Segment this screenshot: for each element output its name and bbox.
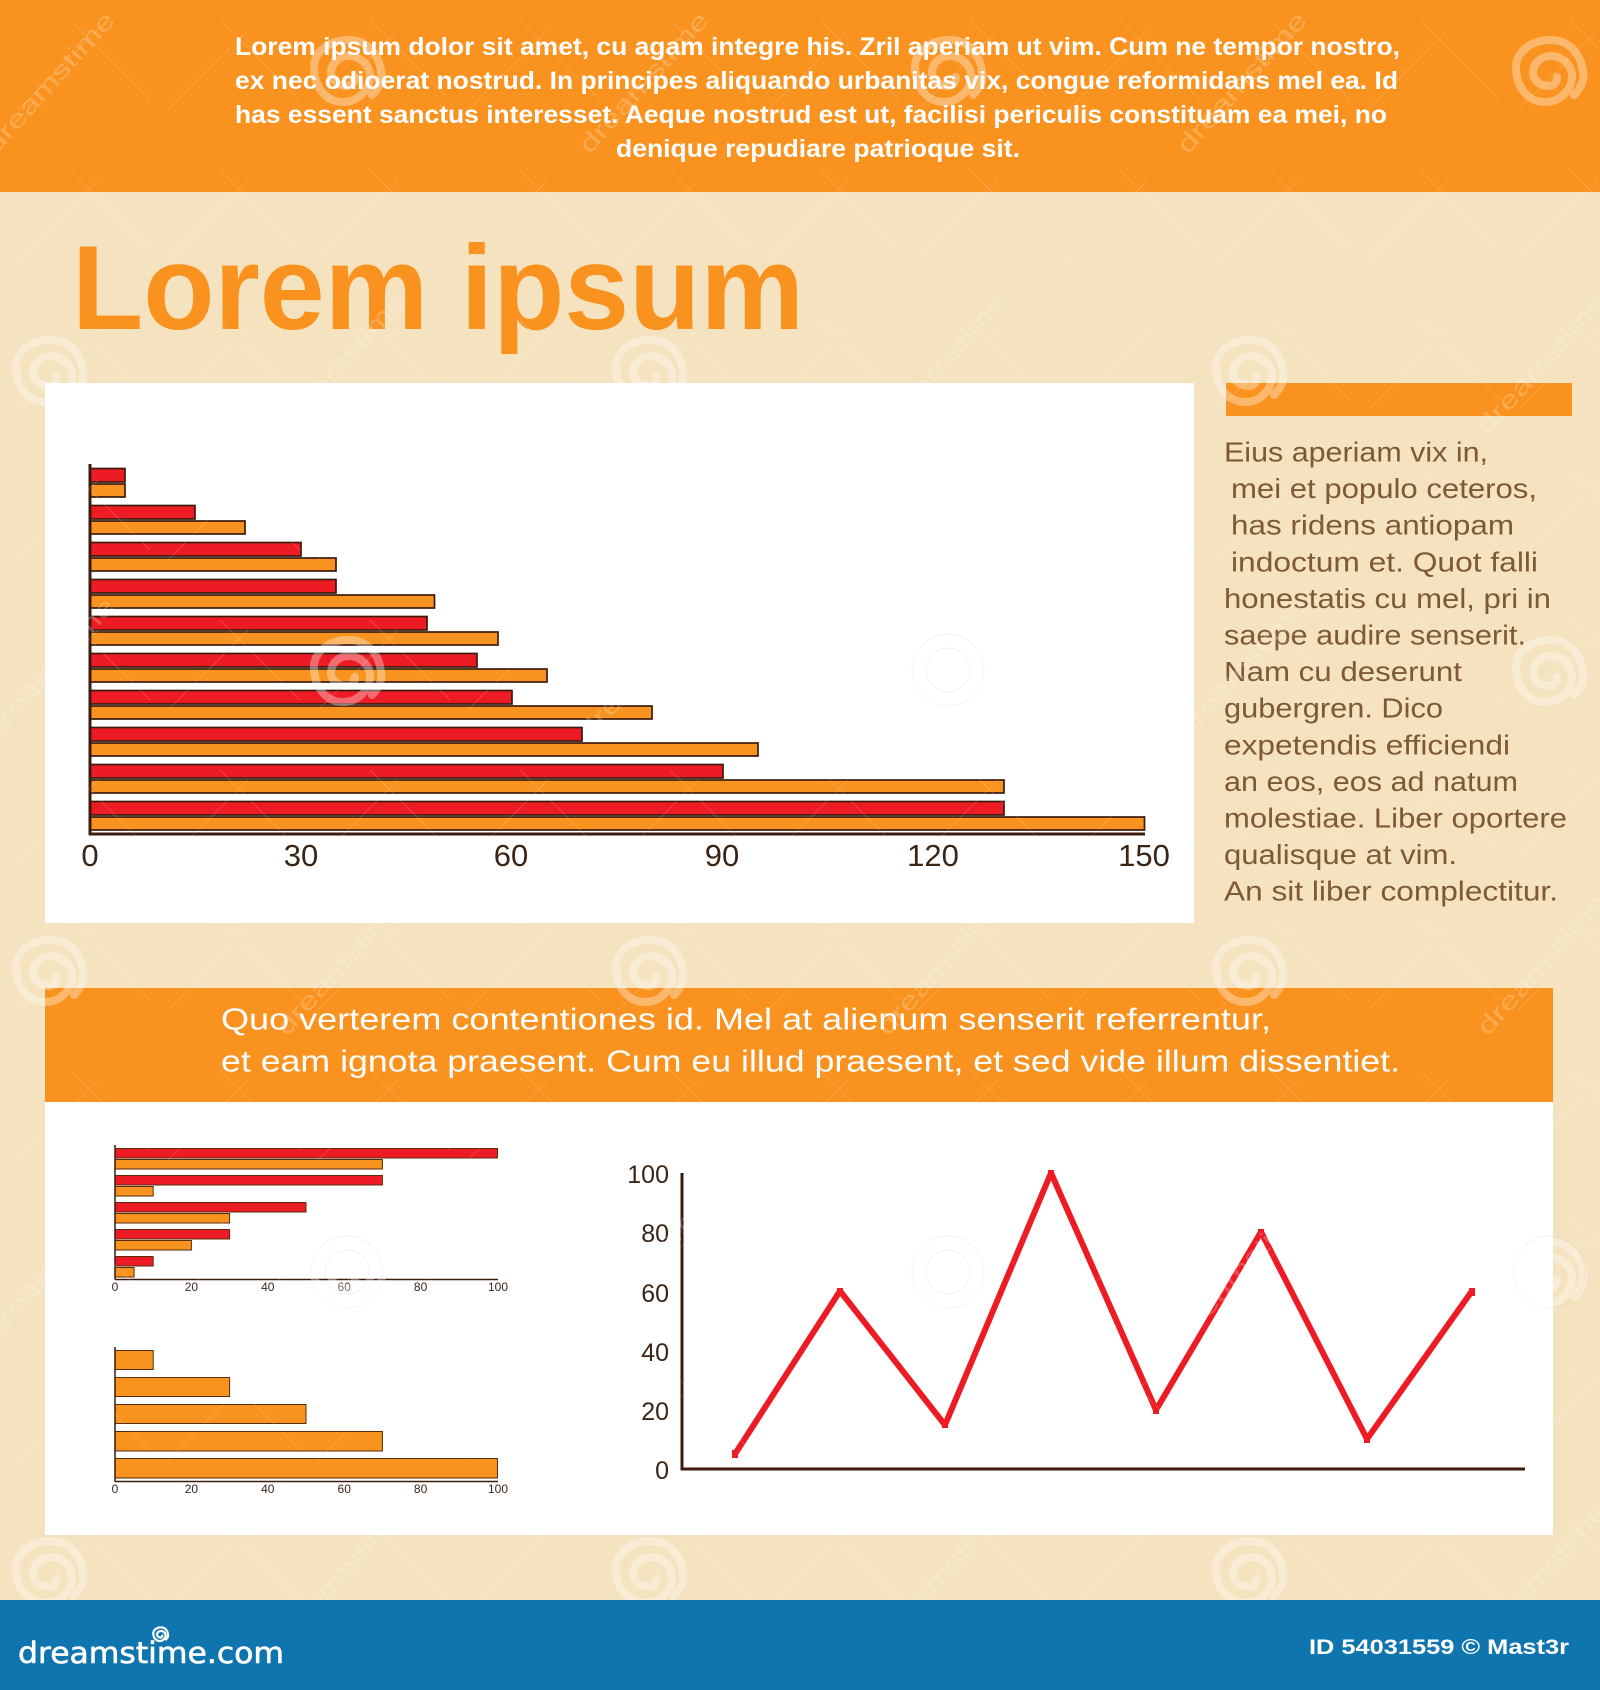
- watermark overlay: dreamstime: [573, 1192, 715, 1345]
- sidebar text: Nam cu deserunt: [1224, 656, 1462, 687]
- watermark overlay: dreamstime: [573, 592, 715, 745]
- axis labels: main bar chart: 150: [1118, 838, 1170, 873]
- sidebar text: saepe audire senserit.: [1224, 620, 1526, 650]
- sidebar text: qualisque at vim.: [1224, 839, 1457, 870]
- header paragraph: has essent sanctus interesset. Aeque nostrud est ut, facilisi periculis constituam ea mei, no: [235, 101, 1387, 129]
- watermark overlay: dreamstime: [871, 888, 1013, 1041]
- sidebar text: has ridens antiopam: [1231, 510, 1514, 541]
- sidebar text: indoctum et. Quot falli: [1231, 546, 1538, 577]
- header paragraph: denique repudiare patrioque sit.: [616, 135, 1020, 163]
- chart: small paired bars: 0: [112, 1280, 119, 1294]
- section band: [45, 988, 1553, 1102]
- watermark overlay: dreamstime: [1471, 1497, 1600, 1650]
- chart: small paired bars: 20: [185, 1280, 198, 1294]
- chart: paired horizontal bars: [89, 464, 1145, 835]
- sidebar text: gubergren. Dico: [1224, 693, 1443, 724]
- chart: small single bars: 80: [414, 1482, 428, 1496]
- chart: small paired bars: 80: [414, 1280, 428, 1294]
- watermark overlay: dreamstime: [1171, 6, 1313, 159]
- axis labels: main bar chart: 60: [494, 838, 528, 873]
- watermark overlay: dreamstime: [1471, 287, 1600, 440]
- chart: line chart: 20: [641, 1398, 669, 1426]
- chart: small single bars: 100: [488, 1482, 508, 1496]
- chart: small paired bars: 60: [338, 1280, 351, 1294]
- watermark overlay: dreamstime: [573, 6, 715, 159]
- chart: small single bars: 40: [261, 1482, 275, 1496]
- watermark overlay: dreamstime: [1171, 1192, 1313, 1345]
- sidebar text: Eius aperiam vix in,: [1224, 436, 1488, 468]
- header paragraph: ex nec odioerat nostrud. In principes aliquando urbanitas vix, congue reformidans mel ea. Id: [235, 67, 1398, 95]
- sidebar text: expetendis efficiendi: [1224, 729, 1510, 760]
- chart: line chart: 40: [641, 1339, 669, 1367]
- watermark overlay: dreamstime: [871, 287, 1013, 440]
- sidebar text: an eos, eos ad natum: [1224, 766, 1518, 797]
- chart: small single bars: 20: [185, 1482, 198, 1496]
- axis labels: main bar chart: 120: [907, 838, 959, 873]
- watermark overlay: dreamstime: [270, 287, 412, 440]
- section band text: [221, 1002, 1400, 1078]
- chart: small paired bars: [112, 1145, 508, 1294]
- chart: small paired bars: 100: [488, 1280, 508, 1294]
- header band: [0, 0, 1600, 192]
- footer: [0, 1600, 1600, 1690]
- section band text: Quo verterem contentiones id. Mel at alienum senserit referrentur,: [221, 1002, 1271, 1036]
- watermark overlay: dreamstime: [1171, 592, 1313, 745]
- footer image id: ID 54031559 © Mast3r: [1309, 1636, 1569, 1659]
- axis labels: main bar chart: 0: [81, 838, 99, 873]
- icon: footer logo spiral: [153, 1627, 168, 1641]
- watermark overlay: dreamstime: [871, 1497, 1013, 1650]
- sidebar text: honestatis cu mel, pri in: [1224, 583, 1551, 614]
- title: Lorem ipsum: [72, 221, 804, 355]
- panel: lower charts: [45, 1102, 1553, 1535]
- footer logo text: dreamstime.com: [18, 1636, 284, 1670]
- chart: line chart: 80: [641, 1220, 669, 1248]
- axis labels: main bar chart: [81, 838, 1170, 873]
- sidebar text: An sit liber complectitur.: [1224, 876, 1558, 907]
- axis labels: main bar chart: 90: [705, 838, 739, 873]
- chart: small single bars: 60: [338, 1482, 351, 1496]
- sidebar text: molestiae. Liber oportere: [1224, 802, 1567, 834]
- chart: line chart: 100: [627, 1161, 669, 1189]
- chart: small paired bars: 40: [261, 1280, 275, 1294]
- watermark overlay: dreamstime: [1471, 888, 1600, 1041]
- axis labels: main bar chart: 30: [284, 838, 318, 873]
- watermark overlay: dreamstime: [270, 888, 412, 1041]
- section band text: et eam ignota praesent. Cum eu illud praesent, et sed vide illum dissentiet.: [221, 1044, 1400, 1078]
- panel: main bar chart: [45, 383, 1194, 923]
- chart: line chart: 0: [655, 1457, 669, 1485]
- chart: line chart: [627, 1161, 1525, 1485]
- header paragraph: Lorem ipsum dolor sit amet, cu agam integre his. Zril aperiam ut vim. Cum ne tempor nostro,: [235, 33, 1400, 61]
- sidebar text: mei et populo ceteros,: [1231, 473, 1537, 504]
- chart: line chart: 60: [641, 1280, 669, 1308]
- watermark overlay: dreamstime: [270, 1497, 412, 1650]
- sidebar text: [1224, 436, 1567, 907]
- chart: small single bars: [112, 1347, 508, 1496]
- chart: small single bars: 0: [112, 1482, 119, 1496]
- sidebar heading bar: [1226, 383, 1572, 416]
- header paragraph: [235, 33, 1400, 163]
